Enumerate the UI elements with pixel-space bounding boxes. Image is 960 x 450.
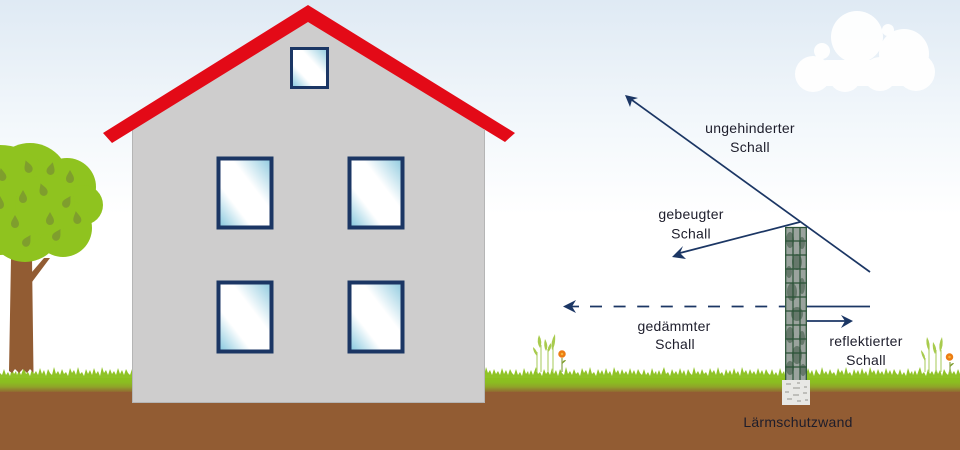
- ground: [0, 364, 960, 450]
- arrow: reflected sound: [807, 315, 853, 328]
- label: reflektierter Schall: Schall: [846, 352, 886, 368]
- window lower right: [350, 282, 402, 352]
- canopy: [0, 143, 103, 262]
- sky background: [0, 0, 960, 215]
- window upper right: [350, 158, 402, 228]
- label: reflektierter Schall: reflektierter: [829, 333, 903, 349]
- window lower left: [218, 282, 272, 352]
- attic window: [292, 48, 328, 88]
- trunk: [9, 258, 34, 373]
- plants right: [921, 337, 954, 372]
- label: Lärmschutzwand: Lärmschutzwand: [743, 414, 853, 430]
- foundation: [782, 380, 810, 405]
- arrow: damped sound: [563, 300, 870, 313]
- leaves: [0, 159, 82, 248]
- plants left: [533, 334, 566, 372]
- roof: [103, 5, 515, 143]
- label: gedämmter Schall: Schall: [655, 336, 695, 352]
- cloud: [795, 11, 935, 92]
- wall: [133, 14, 484, 402]
- label: gebeugter Schall: gebeugter: [658, 206, 724, 222]
- noise barrier: [782, 227, 810, 405]
- label: ungehinderter Schall: Schall: [730, 139, 770, 155]
- tree: [0, 143, 103, 373]
- label: ungehinderter Schall: ungehinderter: [705, 120, 795, 136]
- house: [103, 5, 515, 402]
- window upper left: [218, 158, 272, 228]
- arrow: unimpeded sound: [625, 95, 870, 272]
- gabion wall: [785, 227, 807, 380]
- arrow: diffracted sound: [672, 222, 800, 259]
- label: gedämmter Schall: gedämmter: [637, 318, 711, 334]
- label: gebeugter Schall: Schall: [671, 226, 711, 242]
